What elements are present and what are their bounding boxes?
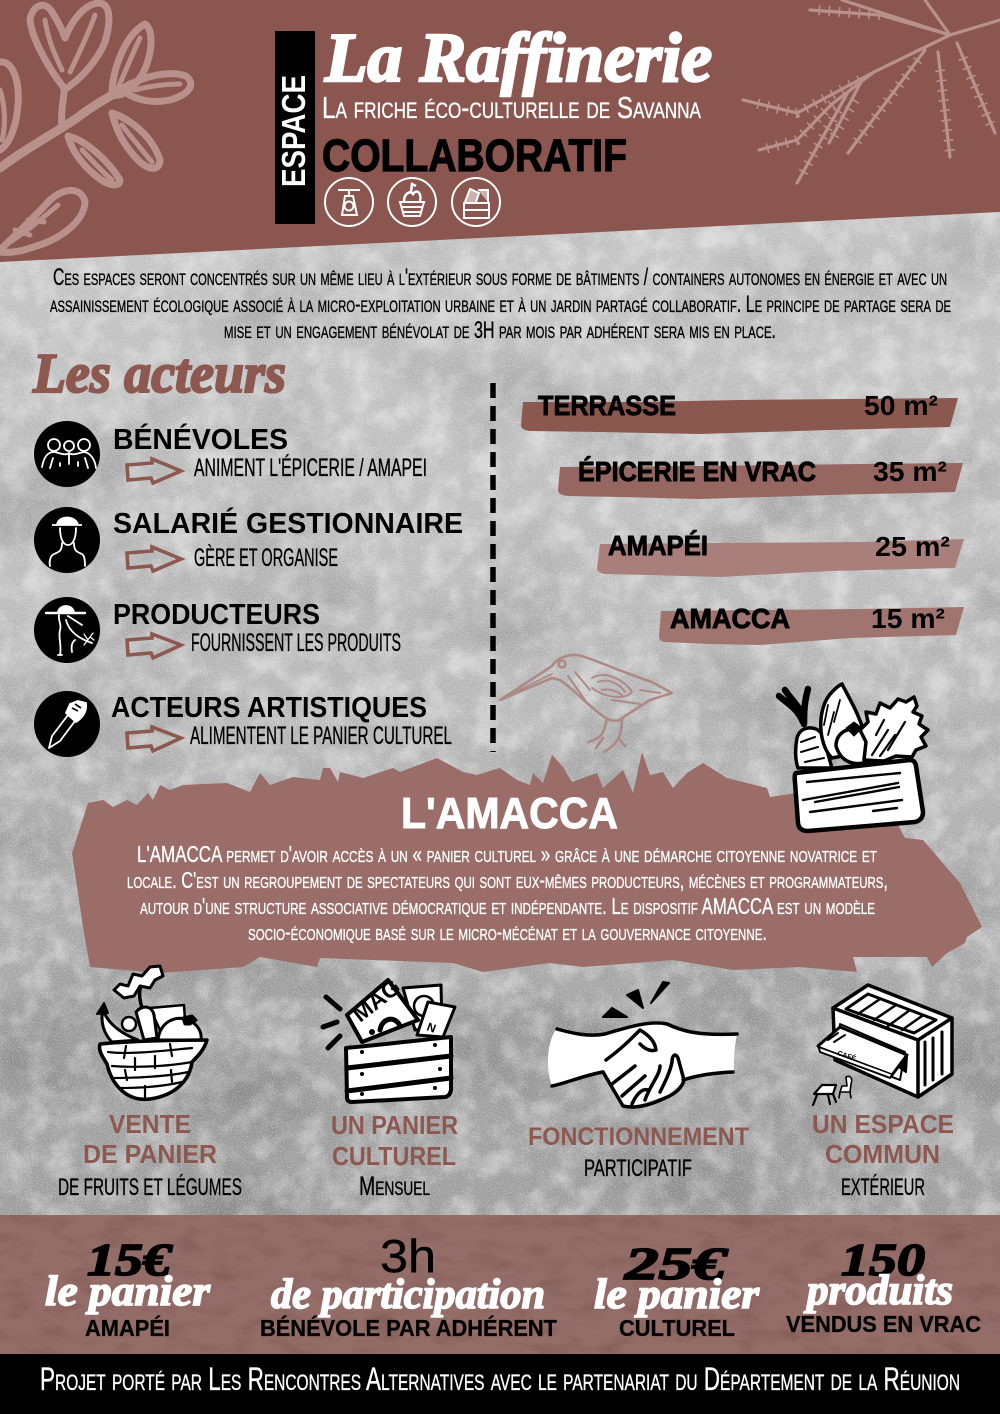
stat: 15 euros: [45, 1234, 211, 1341]
arrow: [127, 727, 181, 751]
feature: panier culturel: [323, 973, 458, 1201]
stat: 3h: 3h: [380, 1230, 436, 1282]
description: ANIMENT L'ÉPICERIE / AMAPEI: [194, 453, 427, 482]
bar: terrasse: [521, 390, 958, 434]
decorative floral branch right: [743, 0, 1000, 183]
description: EXTÉRIEUR: [841, 1174, 925, 1201]
icon: cultural crate: [452, 178, 500, 226]
feature: espace commun: [812, 985, 954, 1201]
description: GÈRE ET ORGANISE: [194, 543, 338, 572]
icon: scale: [325, 178, 373, 226]
heading: les acteurs: Les acteurs: [32, 343, 286, 405]
actor: acteurs artistiques: [34, 691, 452, 757]
label line two: COMMUN: [825, 1139, 940, 1169]
stat: 25 euros: le panier: [594, 1272, 760, 1318]
stat: 150 produits: VENDUS EN VRAC: [786, 1311, 981, 1337]
bar: amapéi: [597, 530, 964, 577]
label line two: CULTUREL: [332, 1141, 456, 1171]
description: FOURNISSENT LES PRODUITS: [191, 629, 401, 657]
label: VENTE: [109, 1109, 191, 1139]
label: UN PANIER: [331, 1110, 458, 1140]
stat: 15 euros: 15€: [87, 1234, 173, 1285]
stat: 3h: BÉNÉVOLE PAR ADHÉRENT: [260, 1314, 557, 1341]
label line two: DE PANIER: [83, 1139, 217, 1169]
stat: 150 produits: [786, 1234, 981, 1337]
icon: paintbrush: [34, 691, 100, 757]
description: Mensuel: [359, 1171, 430, 1201]
description: DE FRUITS ET LÉGUMES: [58, 1174, 242, 1201]
label: PRODUCTEURS: [113, 599, 320, 631]
bar: épicerie en vrac: ÉPICERIE EN VRAC: [578, 456, 816, 487]
stat: 25 euros: [594, 1238, 760, 1341]
icon: basket: [97, 966, 207, 1099]
description: [127, 841, 888, 945]
surface bars: [521, 390, 964, 645]
decorative floral branch left: [0, 3, 191, 252]
actor: salarié gestionnaire: [34, 507, 463, 573]
description: ALIMENTENT LE PANIER CULTUREL: [190, 722, 452, 750]
icon: worker: [34, 507, 100, 573]
description: socio-économique basé sur le micro-mécénat et la gouvernance citoyenne.: [248, 919, 767, 945]
feature: fonctionnement: [528, 982, 749, 1182]
torn brush shape: [72, 752, 982, 973]
description: PARTICIPATIF: [584, 1155, 692, 1182]
bar: amacca: AMACCA: [670, 603, 790, 634]
arrow: [127, 459, 181, 483]
icon: magazine crate: MAG: [347, 973, 405, 1027]
bar: terrasse: 50 m²: [864, 390, 938, 421]
icon: magazine crate: N: [425, 1020, 438, 1036]
bar: épicerie en vrac: 35 m²: [873, 456, 947, 487]
label: ACTEURS ARTISTIQUES: [111, 692, 427, 724]
stat: 3h: de participation: [271, 1272, 545, 1318]
icon: basket: [388, 178, 436, 226]
bar: amapéi: 25 m²: [875, 531, 950, 562]
stats band: [0, 1215, 1000, 1355]
black bar with ESPACE: ESPACE: [275, 75, 312, 187]
arrow: [127, 547, 181, 571]
title: La Raffinerie: [324, 20, 712, 97]
icon: vegetable crate: [779, 684, 928, 831]
bar: amapéi: AMAPÉI: [608, 530, 708, 561]
icon: farmer: [34, 597, 100, 663]
stat: 15 euros: le panier: [45, 1269, 211, 1315]
label: UN ESPACE: [812, 1109, 954, 1139]
icon: magazine crate: [323, 973, 455, 1102]
bar: épicerie en vrac: [558, 456, 963, 499]
actor: bénévoles: [34, 421, 427, 487]
footer: [0, 1354, 1000, 1414]
icon: bird: [500, 655, 672, 752]
stat: 150 produits: 150: [841, 1234, 925, 1285]
icon: volunteers: [34, 421, 100, 487]
subtitle: La friche éco-culturelle de Savanna: [322, 90, 701, 125]
stat: 150 produits: produits: [804, 1268, 953, 1314]
feature: vente de panier: [58, 966, 242, 1201]
heading collaboratif: COLLABORATIF: [322, 130, 627, 181]
stat: 3h: [260, 1230, 557, 1341]
label: SALARIÉ GESTIONNAIRE: [113, 508, 463, 540]
label: BÉNÉVOLES: [113, 424, 288, 456]
stat: 15 euros: AMAPÉI: [85, 1314, 170, 1341]
bar: terrasse: TERRASSE: [538, 390, 676, 421]
header panel: [0, 0, 1000, 262]
bar: amacca: 15 m²: [871, 603, 945, 634]
arrow: [127, 634, 181, 658]
icon: container café: CAFÉ: [836, 1048, 858, 1063]
heading: L'AMACCA: [401, 789, 618, 838]
stat: 25 euros: 25€: [624, 1238, 729, 1289]
bar: amacca: [659, 603, 964, 645]
icon: container café: [813, 985, 952, 1105]
black bar with ESPACE: [275, 31, 315, 224]
stat: 25 euros: CULTUREL: [619, 1315, 735, 1341]
panel: amacca: [72, 752, 982, 973]
actor: producteurs: [34, 597, 401, 663]
label: FONCTIONNEMENT: [528, 1123, 749, 1151]
intro text: [50, 264, 951, 344]
icon: handshake: [548, 982, 737, 1108]
